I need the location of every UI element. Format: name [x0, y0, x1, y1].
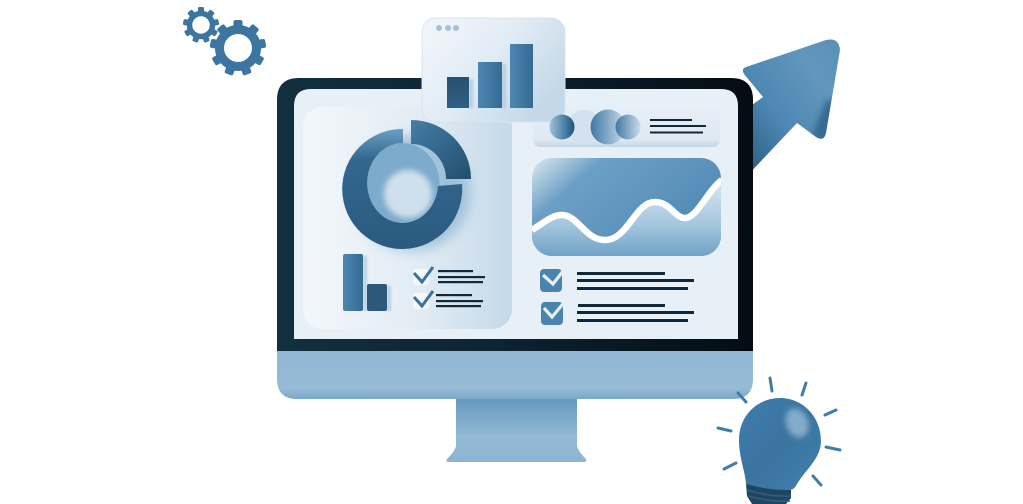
chart area — [532, 180, 722, 256]
donut top-right segment — [411, 120, 471, 179]
checklist: small — [413, 267, 485, 309]
strip background — [533, 107, 720, 147]
bar chart: small — [343, 254, 391, 311]
text lines — [577, 272, 694, 290]
arrow — [743, 39, 840, 178]
text lines — [650, 119, 706, 134]
bulb highlight — [782, 405, 812, 441]
checkbox — [540, 266, 567, 292]
donut inner glow — [366, 143, 440, 225]
large gear — [210, 20, 266, 76]
text lines — [436, 294, 483, 307]
text lines — [577, 304, 694, 322]
panel: left dashboard — [303, 107, 512, 329]
window dots — [436, 25, 459, 31]
bezel — [277, 78, 753, 351]
bulb glass — [739, 398, 821, 490]
chart background — [532, 158, 721, 256]
bulb base rings — [747, 490, 791, 501]
bars — [447, 44, 533, 108]
chart line — [532, 180, 722, 240]
overlapping circles — [550, 110, 640, 144]
rays — [718, 378, 840, 485]
donut chart — [342, 120, 471, 251]
checkbox — [541, 299, 567, 325]
bulb base — [746, 484, 791, 504]
panel background — [303, 107, 512, 329]
text lines — [438, 270, 485, 283]
checklist: large — [540, 266, 694, 325]
small gear — [183, 7, 219, 43]
chin — [277, 345, 753, 399]
donut shadow — [354, 135, 470, 251]
floating bar chart card — [422, 18, 565, 122]
panel: legend strip — [533, 107, 720, 147]
line chart card — [532, 158, 722, 256]
checkbox — [413, 291, 433, 309]
illustration: analytics dashboard monitor — [183, 7, 842, 504]
donut main segment — [342, 129, 462, 249]
icon: gears — [183, 7, 266, 76]
icon: light bulb — [718, 378, 840, 504]
card background — [422, 18, 565, 122]
monitor — [277, 18, 753, 462]
stand — [446, 398, 586, 462]
screen — [294, 89, 738, 339]
checkbox — [413, 267, 433, 285]
